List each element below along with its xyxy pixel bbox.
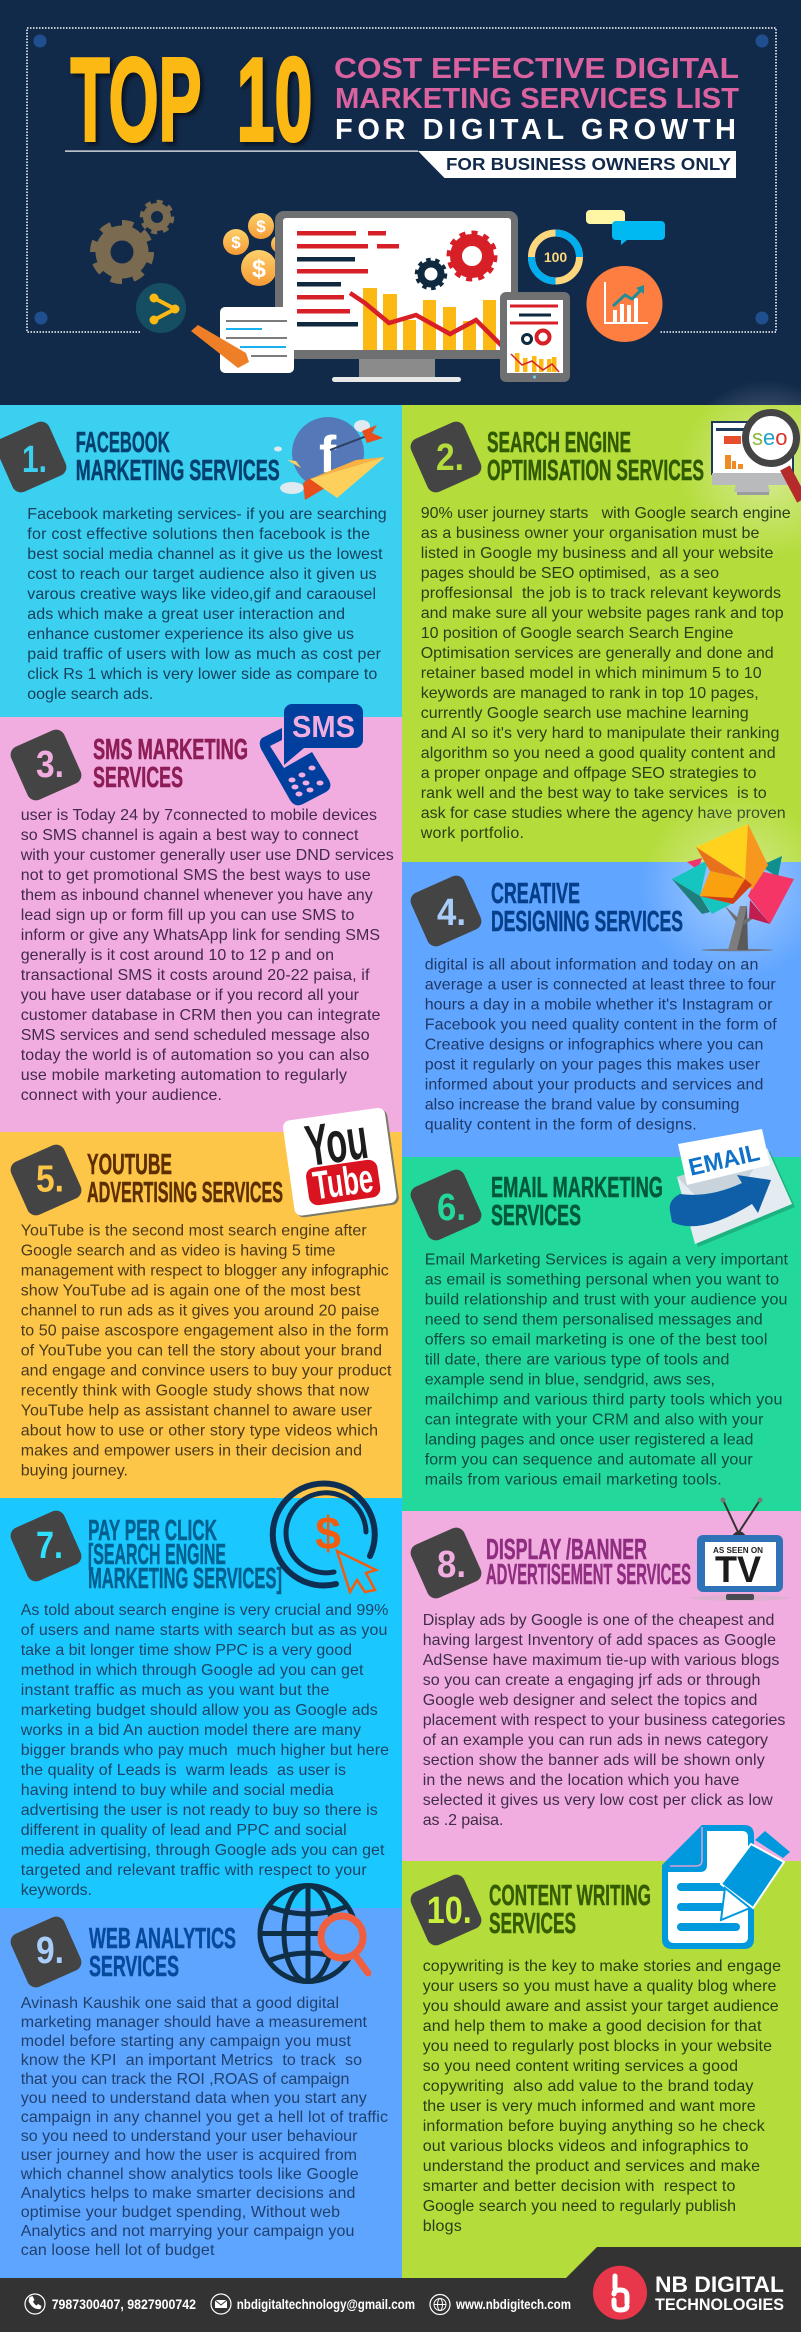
text block: analytics: that you can track the ROI ,ROAS of campaign: [21, 2071, 349, 2088]
text block: youtube: management with respect to blogger any infographic: [21, 1262, 389, 1280]
text block: creative: average a user is connected at least three to four: [425, 976, 776, 993]
text block: seo: a proper onpage and offpage SEO strategies to: [421, 765, 756, 782]
text block: youtube: about how to use or other story type videos which: [21, 1422, 378, 1440]
number badge 7: 7.: [36, 1525, 63, 1567]
text block: youtube: buying journey.: [21, 1462, 128, 1480]
text block: analytics: you need to understand data when you start any: [21, 2090, 367, 2107]
text block: ppc: marketing budget should allow you as Google ads: [21, 1702, 378, 1719]
text block: email: offers so email marketing is one of the best tool: [425, 1332, 767, 1348]
text block: content writing: [423, 1958, 781, 2235]
text block: analytics: so you need to understand your user behaviour: [21, 2128, 358, 2145]
number badge 2: 2.: [436, 437, 464, 479]
icon: email envelope with arrow: EMAIL: [686, 1139, 762, 1182]
panel: 6 email marketing: [402, 1129, 801, 1511]
text block: content writing: so you need content writing services a good: [423, 2058, 738, 2075]
text block: ppc: of users and name starts with search but as as you: [21, 1622, 387, 1639]
heading: pay per click: [88, 1515, 282, 1595]
number badge 6: [408, 1167, 484, 1243]
icon: youtube tile: Tube: [310, 1157, 376, 1208]
text block: sms: them as inbound channel whenever you have any: [21, 887, 373, 904]
title: top 10: TOP: [70, 34, 202, 166]
text block: content writing: smarter and better decision with respect to: [423, 2178, 735, 2195]
icon: tv as seen on: TV: [715, 1549, 761, 1590]
text block: email: form you can sequence and automate all your: [425, 1452, 753, 1468]
number badge 9: 9.: [36, 1930, 64, 1972]
contact: phone: 7987300407, 9827900742: [52, 2297, 196, 2312]
heading: sms marketing services: SERVICES: [93, 762, 183, 794]
icon: document and pen: [662, 1825, 790, 1949]
icon: low-poly tree: [672, 824, 794, 951]
text block: youtube: to 50 paise ascospore engagement also in the form: [21, 1322, 389, 1340]
panel: 1 facebook marketing: [0, 405, 402, 717]
text block: seo: work portfolio.: [420, 825, 524, 842]
panel: 7 pay per click: [0, 1483, 402, 1908]
text block: creative: also increase the brand value by consuming: [425, 1096, 739, 1113]
number badge 5: 5.: [36, 1159, 64, 1201]
text block: youtube: recently think with Google study shows that now: [21, 1382, 369, 1400]
number badge 2: [408, 419, 484, 495]
heading: creative designing services: CREATIVE: [491, 878, 580, 910]
number badge 1: [0, 419, 69, 495]
text block: youtube: [21, 1222, 392, 1480]
number badge 7: [8, 1508, 84, 1584]
icon: gold coins: $: [252, 255, 266, 283]
text block: ppc: media advertising, through Google ads you can get: [21, 1842, 385, 1859]
text block: seo: 90% user journey starts with Google search engine: [421, 505, 791, 522]
text block: content writing: copywriting is the key to make stories and engage: [423, 1958, 781, 1975]
text block: ppc: targeted and relevant traffic with respect to your: [21, 1862, 367, 1879]
text block: analytics: Avinash Kaushik one said that a good digital: [21, 1995, 339, 2012]
heading: content writing services: SERVICES: [489, 1908, 576, 1940]
heading: email marketing services: EMAIL MARKETING: [491, 1172, 663, 1204]
heading: email marketing services: SERVICES: [491, 1200, 581, 1232]
text block: sms: not to get promotional SMS the best ways to use: [21, 867, 371, 884]
heading: pay per click: [SEARCH ENGINE: [88, 1539, 226, 1571]
text block: facebook: varous creative ways like video,gif and caraousel: [27, 586, 376, 603]
text block: creative: [425, 956, 777, 1133]
text block: ppc: [20, 1602, 389, 1899]
text block: facebook: [27, 506, 387, 703]
text block: youtube: and engage and convince users to buy your product: [21, 1362, 392, 1380]
icon: gold coins: $: [276, 237, 284, 252]
text block: email: as email is something personal when you want to: [425, 1272, 779, 1288]
text block: youtube: YouTube is the second most search engine after: [21, 1222, 367, 1240]
text block: display ads: of an example you can run ads in news category: [423, 1732, 768, 1749]
title: subtitle lines: FOR DIGITAL GROWTH: [335, 114, 736, 146]
text block: sms: with your customer generally user use DND services: [20, 847, 394, 864]
text block: seo: rank well and the best way to take services is to: [421, 785, 767, 802]
text block: facebook: enhance customer experience its also give us: [27, 626, 354, 643]
heading: facebook marketing services: [76, 427, 280, 487]
text block: youtube: Google search and as video is having 5 time: [21, 1242, 335, 1260]
icon: ppc target and cursor: $: [315, 1507, 341, 1559]
text block: email: [425, 1252, 789, 1488]
heading: display banner advertisement services: DISPLAY /BANNER: [486, 1534, 647, 1566]
text block: seo: and make sure all your website pages rank and top: [421, 605, 784, 622]
logo: nb digital technologies: TECHNOLOGIES: [655, 2295, 784, 2314]
text block: sms: user is Today 24 by 7connected to mobile devices: [21, 807, 377, 824]
icon: seo monitor and magnifier: [712, 412, 801, 500]
icon: donut gauge 100: 100: [544, 249, 567, 265]
text block: creative: quality content in the form of designs.: [425, 1116, 697, 1133]
text block: seo: pages should be SEO optimised, as a seo: [421, 565, 719, 582]
text block: seo: [420, 505, 791, 842]
text block: ppc: advertising the user is not ready to buy so there is: [21, 1802, 378, 1819]
number badge 5: [8, 1142, 84, 1218]
title: subtitle lines: MARKETING SERVICES LIST: [335, 83, 739, 115]
contact: website: [430, 2294, 571, 2314]
number badge 4: 4.: [437, 892, 466, 934]
text block: content writing: your users so you must have a quality blog where: [423, 1978, 776, 1995]
icon: orange growth chart: [586, 266, 662, 342]
text block: sms: inform or give any WhatsApp link for sending SMS: [21, 927, 380, 944]
text block: sms: use mobile marketing automation to regularly: [21, 1067, 347, 1084]
panel: 8 display banner: [402, 1498, 801, 1861]
text block: email: till date, there are various type of tools and: [425, 1352, 729, 1368]
banner: for business owners only: [65, 150, 736, 178]
text block: seo: proffesionsal the job is to track relevant keywords: [421, 585, 781, 602]
heading: search engine optimisation services: SEARCH ENGINE: [487, 427, 631, 459]
icon: sms phone: SMS: [292, 709, 355, 744]
text block: display ads: Display ads by Google is one of the cheapest and: [423, 1612, 774, 1629]
banner: for business owners only: FOR BUSINESS OWNERS ONLY: [446, 154, 731, 174]
text block: display ads: in the news and the location which you have: [423, 1772, 739, 1789]
text block: ppc: method in which through Google ad you can get: [21, 1662, 364, 1679]
text block: ppc: keywords.: [21, 1882, 92, 1899]
icon: facebook with paper plane: f: [319, 426, 337, 484]
text block: seo: Optimisation services are generally and done and: [421, 645, 774, 662]
heading: email marketing services: [491, 1172, 663, 1232]
heading: youtube advertising services: ADVERTISING SERVICES: [87, 1177, 283, 1209]
number badge 10: [408, 1872, 484, 1948]
text block: content writing: you should aware and assist your target audience: [423, 1998, 779, 2015]
icon: tablet: [500, 292, 570, 382]
contact: website: www.nbdigitech.com: [455, 2297, 571, 2312]
heading: facebook marketing services: FACEBOOK: [76, 427, 170, 459]
text block: ppc: having intend to buy while and social media: [21, 1782, 334, 1799]
heading: sms marketing services: SMS MARKETING: [93, 734, 248, 766]
text block: display ads: as .2 paisa.: [423, 1812, 503, 1829]
icon: document and pencil: [191, 307, 294, 373]
panel: 4 creative designing: [402, 790, 801, 1157]
text block: content writing: the user is very much informed and want more: [423, 2098, 756, 2115]
text block: email: mails from various email marketing tools.: [425, 1472, 722, 1488]
text block: creative: Creative designs or infographics where you can: [425, 1036, 763, 1053]
text block: youtube: show YouTube ad is again one of the most best: [21, 1282, 361, 1300]
icon: gold coins: $: [256, 217, 266, 236]
text block: facebook: best social media channel as it give us the lowest: [27, 546, 383, 563]
panel: 9 web analytics: [0, 1885, 402, 2278]
text block: analytics: which channel show analytics tools like Google: [20, 2166, 359, 2183]
heading: youtube advertising services: YOUTUBE: [87, 1149, 172, 1181]
text block: email: Email Marketing Services is again a very important: [425, 1252, 789, 1268]
text block: ppc: As told about search engine is very crucial and 99%: [21, 1602, 388, 1619]
number badge 6: 6.: [437, 1187, 466, 1229]
text block: content writing: information before buying anything so he check: [423, 2118, 766, 2135]
text block: seo: ask for case studies where the agency have proven: [421, 805, 786, 822]
text block: display ads: section show the banner ads will be shown only: [423, 1752, 765, 1769]
text block: sms: today the world is of automation so you can also: [21, 1047, 369, 1064]
text block: display ads: having largest Inventory of add spaces as Google: [423, 1632, 776, 1649]
icon: youtube tile: [282, 1103, 400, 1218]
number badge 4: [408, 873, 484, 949]
text block: seo: as a business owner your organisation must be: [421, 525, 759, 542]
text block: analytics: marketing manager should have a measurement: [21, 2014, 368, 2031]
icon: donut gauge 100: [532, 233, 580, 281]
text block: email: need to send them personalised messages and: [425, 1312, 763, 1328]
icon: gold coins: [223, 213, 289, 286]
text block: email: mailchimp and various third party tools which you: [425, 1392, 782, 1408]
text block: sms: lead sign up or form fill up you can use SMS to: [21, 907, 354, 924]
text block: ppc: different in quality of lead and PPC and social: [21, 1822, 347, 1839]
header panel: [0, 0, 801, 405]
text block: facebook: cost to reach our target audience also it given us: [27, 566, 377, 583]
text block: email: landing pages and once user registered a lead: [425, 1432, 753, 1448]
text block: sms: generally is it cost around 10 to 12 p and on: [21, 947, 334, 964]
heading: content writing services: [489, 1880, 651, 1940]
heading: web analytics services: SERVICES: [89, 1951, 179, 1983]
text block: display ads: Google web designer and select the topics and: [423, 1692, 757, 1709]
text block: content writing: understand the product and services and make: [423, 2158, 760, 2175]
text block: analytics: [20, 1995, 388, 2259]
text block: analytics: can loose hell lot of budget: [21, 2242, 215, 2259]
text block: ppc: works in a bid An auction model there are many: [20, 1722, 361, 1739]
panel: 5 youtube advertising: [0, 1103, 402, 1498]
logo: nb digital technologies: NB DIGITAL: [655, 2272, 784, 2297]
text block: ppc: bigger brands who pay much much higher but here: [21, 1742, 389, 1759]
icon: ppc target and cursor: [273, 1483, 376, 1592]
icon: seo monitor and magnifier: seo: [752, 425, 788, 450]
icon: tv as seen on: AS SEEN ON: [713, 1546, 763, 1555]
text block: display ads: so you can create a engaging jrf ads or through: [423, 1672, 760, 1689]
text block: email: build relationship and trust with your audience you: [425, 1292, 787, 1308]
text block: sms: so SMS channel is again a best way to connect: [21, 827, 359, 844]
text block: facebook: oogle search ads.: [27, 686, 153, 703]
text block: creative: hours a day in a mobile whether it's Instagram or: [425, 996, 773, 1013]
heading: youtube advertising services: [87, 1149, 283, 1209]
text block: seo: keywords are managed to rank in top 10 pages,: [421, 685, 759, 702]
text block: content writing: Google search you need to regularly publish: [423, 2198, 736, 2215]
text block: sms: transactional SMS it costs around 20-22 paisa, if: [21, 967, 370, 984]
number badge 10: 10.: [427, 1890, 472, 1932]
text block: analytics: Analytics and not marrying your campaign you: [21, 2223, 354, 2240]
title: subtitle lines: COST EFFECTIVE DIGITAL: [334, 53, 739, 85]
icon: email envelope with arrow: [670, 1129, 795, 1247]
heading: content writing services: CONTENT WRITING: [489, 1880, 651, 1912]
icon: speech bubbles: [586, 210, 665, 245]
text block: youtube: channel to run ads as it gives you around 20 paise: [21, 1302, 379, 1320]
text block: facebook: ads which make a great user interaction and: [27, 606, 345, 623]
number badge 3: [8, 727, 84, 803]
text block: analytics: Analytics helps to make smarter decisions and: [21, 2185, 355, 2202]
text block: content writing: and help them to make a good decision for that: [423, 2018, 762, 2035]
text block: creative: digital is all about information and today on an: [425, 956, 758, 973]
icon: desktop monitor with charts: [275, 211, 518, 382]
text block: display ads: [423, 1612, 785, 1829]
text block: youtube: YouTube help as assistant channel to aware user: [21, 1402, 373, 1420]
heading: pay per click: PAY PER CLICK: [88, 1515, 217, 1547]
text block: analytics: model before starting any campaign you must: [21, 2033, 352, 2050]
text block: email: can integrate with your CRM and also with your: [425, 1412, 764, 1428]
title: subtitle lines: [334, 53, 739, 146]
text block: youtube: makes and empower users in their decision and: [21, 1442, 362, 1460]
icon: youtube tile: You: [301, 1106, 372, 1179]
text block: youtube: of YouTube you can tell the story about your brand: [21, 1342, 382, 1360]
text block: seo: algorithm so you need a good quality content and: [421, 745, 776, 762]
text block: seo: and AI so it's very hard to manipulate their ranking: [421, 725, 779, 742]
text block: analytics: user journey and how the user is acquired from: [21, 2147, 357, 2164]
panel: 10 content writing: [402, 1825, 801, 2281]
heading: display banner advertisement services: [486, 1534, 691, 1591]
text block: display ads: selected it gives us very low cost per click as low: [423, 1792, 773, 1809]
text block: analytics: optimise your budget spending, Without web: [21, 2204, 340, 2221]
heading: sms marketing services: [93, 734, 248, 794]
icon: tv as seen on: [692, 1498, 788, 1601]
logo: nb digital technologies: [593, 2266, 784, 2320]
contact: phone: [25, 2294, 196, 2314]
text block: sms: [20, 807, 394, 1104]
icon: facebook with paper plane: [274, 417, 385, 500]
text block: facebook: click Rs 1 which is very lower side as compare to: [27, 666, 377, 683]
text block: analytics: know the KPI an important Metrics to track so: [21, 2052, 362, 2069]
text block: creative: informed about your products and services and: [425, 1076, 763, 1093]
icon: sms phone: [260, 704, 363, 805]
text block: sms: you have user database or if you record all your: [21, 987, 360, 1004]
contact: email: nbdigitaltechnology@gmail.com: [237, 2297, 415, 2312]
heading: web analytics services: [89, 1923, 236, 1983]
text block: display ads: placement with respect to your business categories: [423, 1712, 785, 1729]
icon: olive gears: [94, 202, 172, 280]
footer: [0, 2247, 801, 2332]
title: top 10: 10: [236, 34, 312, 166]
text block: facebook: Facebook marketing services- if you are searching: [27, 506, 387, 523]
text block: creative: Facebook you need quality content in the form of: [425, 1016, 777, 1033]
text block: content writing: copywriting also add value to the brand today: [423, 2078, 753, 2095]
text block: email: example send in blue, sendgrid, aws ses,: [425, 1372, 715, 1388]
heading: creative designing services: [491, 878, 683, 938]
icon: globe and magnifier: [260, 1885, 368, 1982]
number badge 8: [408, 1525, 484, 1601]
text block: sms: customer database in CRM then you can integrate: [21, 1007, 380, 1024]
text block: ppc: take a bit longer time show PPC is a very good: [21, 1642, 352, 1659]
icon: gold coins: $: [231, 233, 241, 252]
text block: facebook: for cost effective solutions then facebook is the: [27, 526, 370, 543]
text block: analytics: campaign in any channel you get a hell lot of traffic: [21, 2109, 388, 2126]
heading: web analytics services: WEB ANALYTICS: [89, 1923, 236, 1955]
text block: seo: retainer based model in which minimum 5 to 10: [421, 665, 762, 682]
panel: 2 search engine optimisation: [402, 380, 801, 862]
dotted frame: [27, 28, 776, 332]
heading: creative designing services: DESIGNING SERVICES: [491, 906, 683, 938]
text block: facebook: paid traffic of users with low as much as cost per: [27, 646, 382, 663]
text block: seo: currently Google search use machine learning: [421, 705, 749, 722]
heading: facebook marketing services: MARKETING SERVICES: [76, 455, 280, 487]
text block: seo: 10 position of Google search Search Engine: [421, 625, 733, 642]
text block: content writing: blogs: [423, 2218, 462, 2235]
text block: sms: connect with your audience.: [21, 1087, 222, 1104]
text block: ppc: the quality of Leads is warm leads as user is: [21, 1762, 346, 1779]
number badge 8: 8.: [437, 1544, 466, 1586]
text block: display ads: AdSense have maximum tie-up with various blogs: [423, 1652, 779, 1669]
panel: 3 sms marketing: [0, 704, 402, 1132]
number badge 1: 1.: [22, 439, 47, 481]
text block: ppc: instant traffic as much as you want but the: [21, 1682, 329, 1699]
text block: seo: listed in Google my business and all your website: [421, 545, 773, 562]
contact: email: [211, 2294, 415, 2314]
icon: share circle: [136, 283, 186, 333]
heading: search engine optimisation services: [487, 427, 704, 487]
text block: content writing: you need to regularly post blocks in your website: [423, 2038, 772, 2055]
text block: creative: post it regularly on your pages this makes user: [425, 1056, 761, 1073]
number badge 9: [8, 1914, 84, 1990]
frame corner dots: [34, 34, 768, 324]
text block: content writing: out various blocks videos and infographics to: [423, 2138, 748, 2155]
text block: sms: SMS services and send scheduled message also: [21, 1027, 370, 1044]
number badge 3: 3.: [36, 744, 64, 786]
heading: pay per click: MARKETING SERVICES]: [88, 1563, 282, 1595]
